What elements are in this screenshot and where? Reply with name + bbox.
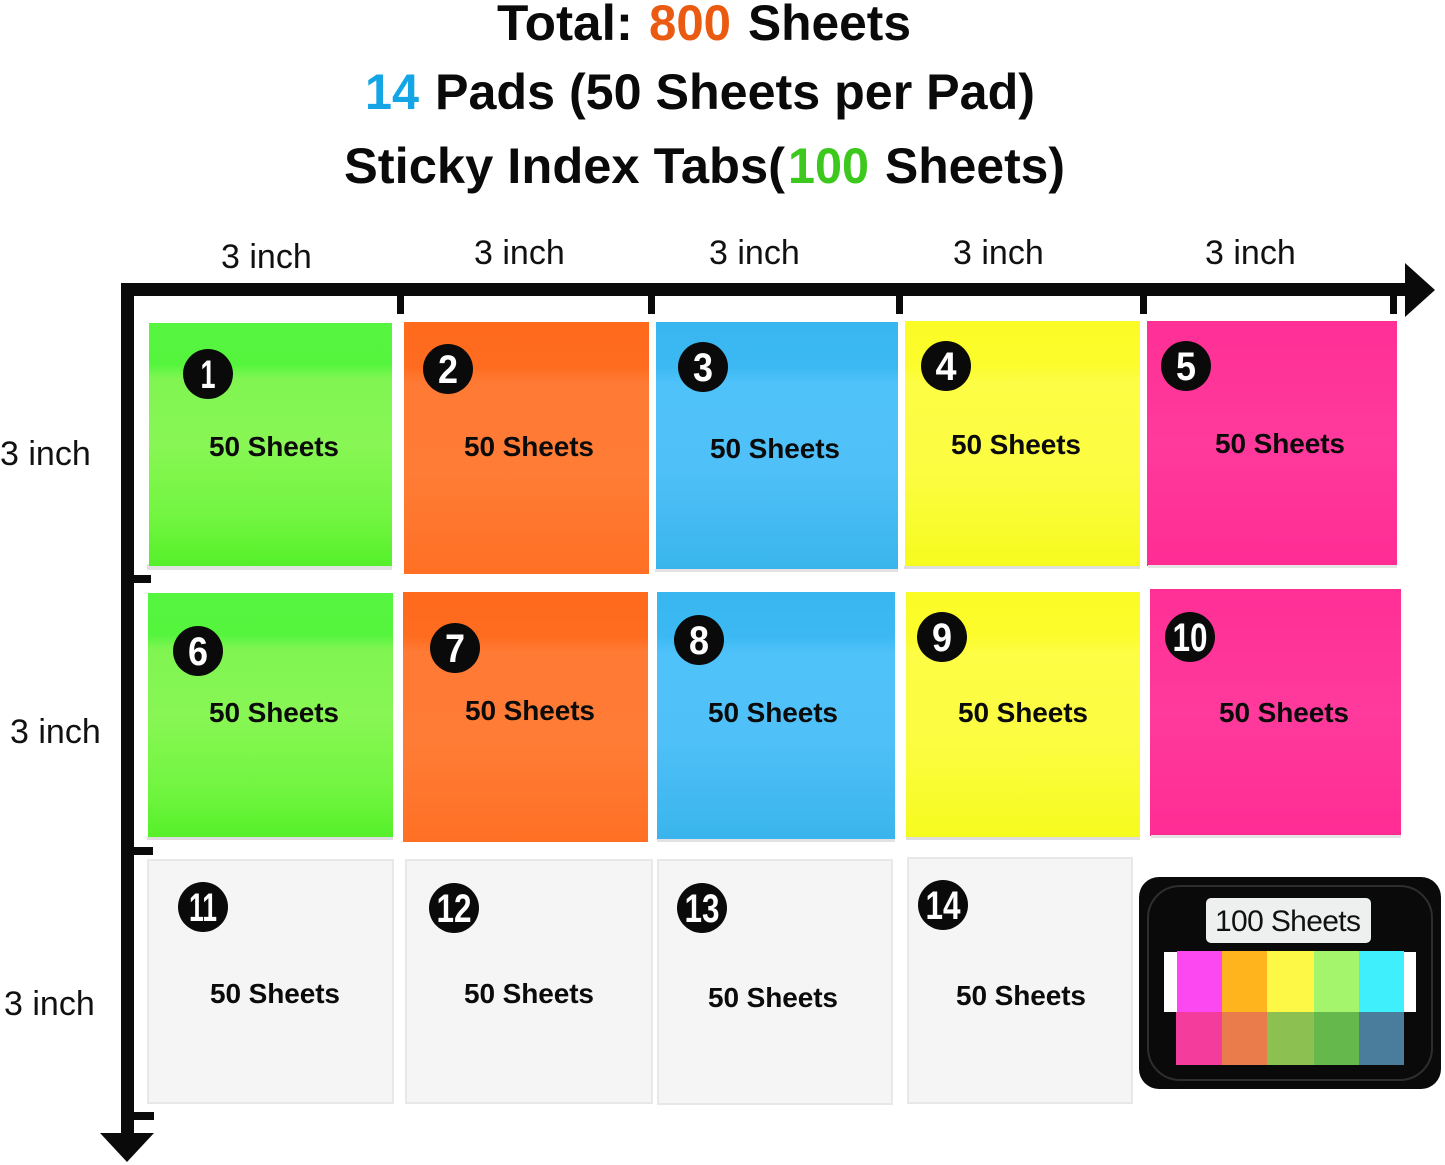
note 8 blue: 8 xyxy=(689,619,709,663)
note 14 white xyxy=(908,858,1132,1103)
note 5 pink: 5 xyxy=(1176,345,1196,389)
note 13 white: 13 xyxy=(684,887,720,931)
note 5 pink xyxy=(1147,321,1397,568)
note 9 yellow xyxy=(906,592,1140,840)
top axis labels: 3 inch xyxy=(474,234,565,272)
note 3 blue xyxy=(655,322,898,572)
title xyxy=(344,0,1065,194)
index tabs holder xyxy=(1139,877,1441,1089)
note 12 white: 12 xyxy=(436,887,472,931)
note 14 white: 50 Sheets xyxy=(956,980,1086,1011)
top axis labels: 3 inch xyxy=(1205,234,1296,272)
note 6 green: 50 Sheets xyxy=(209,697,339,728)
note 11 white: 50 Sheets xyxy=(210,978,340,1009)
note 4 yellow xyxy=(904,321,1140,569)
note 5 pink: 50 Sheets xyxy=(1215,428,1345,459)
note 4 yellow: 50 Sheets xyxy=(951,429,1081,460)
title line: pads: Pads (50 Sheets per Pad) xyxy=(435,64,1035,120)
horizontal axis arrow with ticks xyxy=(121,263,1435,317)
note 11 white xyxy=(148,860,393,1103)
title line: index tabs: Sticky Index Tabs( xyxy=(344,138,785,194)
note 1 green: 1 xyxy=(200,353,216,397)
title line: pads: 14 xyxy=(365,64,419,120)
note 14 white: 14 xyxy=(926,884,961,928)
note 6 green xyxy=(147,593,393,840)
note 12 white: 50 Sheets xyxy=(464,978,594,1009)
top axis labels: 3 inch xyxy=(953,234,1044,272)
note 3 blue: 50 Sheets xyxy=(710,433,840,464)
left axis labels xyxy=(0,435,101,1023)
note 2 orange xyxy=(404,322,649,574)
top axis labels: 3 inch xyxy=(221,238,312,276)
note 13 white xyxy=(658,860,892,1104)
title line: total sheets xyxy=(497,0,911,51)
vertical axis arrow with ticks xyxy=(100,283,154,1162)
note 10 pink: 50 Sheets xyxy=(1219,697,1349,728)
note 13 white: 50 Sheets xyxy=(708,982,838,1013)
note 10 pink: 10 xyxy=(1172,616,1208,660)
note 11 white: 11 xyxy=(189,886,217,930)
note 1 green: 50 Sheets xyxy=(209,431,339,462)
note 9 yellow: 50 Sheets xyxy=(958,697,1088,728)
note 7 orange xyxy=(403,592,648,842)
title line: index tabs xyxy=(344,138,1065,194)
left axis labels: 3 inch xyxy=(0,435,91,473)
note 2 orange: 50 Sheets xyxy=(464,431,594,462)
label: 100 sheets: 100 Sheets xyxy=(1215,905,1361,938)
note 4 yellow: 4 xyxy=(936,345,957,389)
note 10 pink xyxy=(1150,589,1401,838)
tab colour strips xyxy=(1164,951,1416,1065)
note 6 green: 6 xyxy=(188,630,208,674)
note 12 white xyxy=(406,860,652,1103)
note 7 orange: 7 xyxy=(445,627,465,671)
note 8 blue xyxy=(657,592,895,842)
note 9 yellow: 9 xyxy=(932,616,952,660)
note 8 blue: 50 Sheets xyxy=(708,697,838,728)
title line: index tabs: Sheets) xyxy=(885,138,1065,194)
note 3 blue: 3 xyxy=(693,346,713,390)
left axis labels: 3 inch xyxy=(10,713,101,751)
note 7 orange: 50 Sheets xyxy=(465,695,595,726)
title line: index tabs: 100 xyxy=(788,138,869,194)
left axis labels: 3 inch xyxy=(4,985,95,1023)
note 1 green xyxy=(147,323,392,570)
note 2 orange: 2 xyxy=(438,348,458,392)
top axis labels: 3 inch xyxy=(709,234,800,272)
label: 100 sheets xyxy=(1206,898,1371,943)
top axis labels xyxy=(221,234,1296,276)
